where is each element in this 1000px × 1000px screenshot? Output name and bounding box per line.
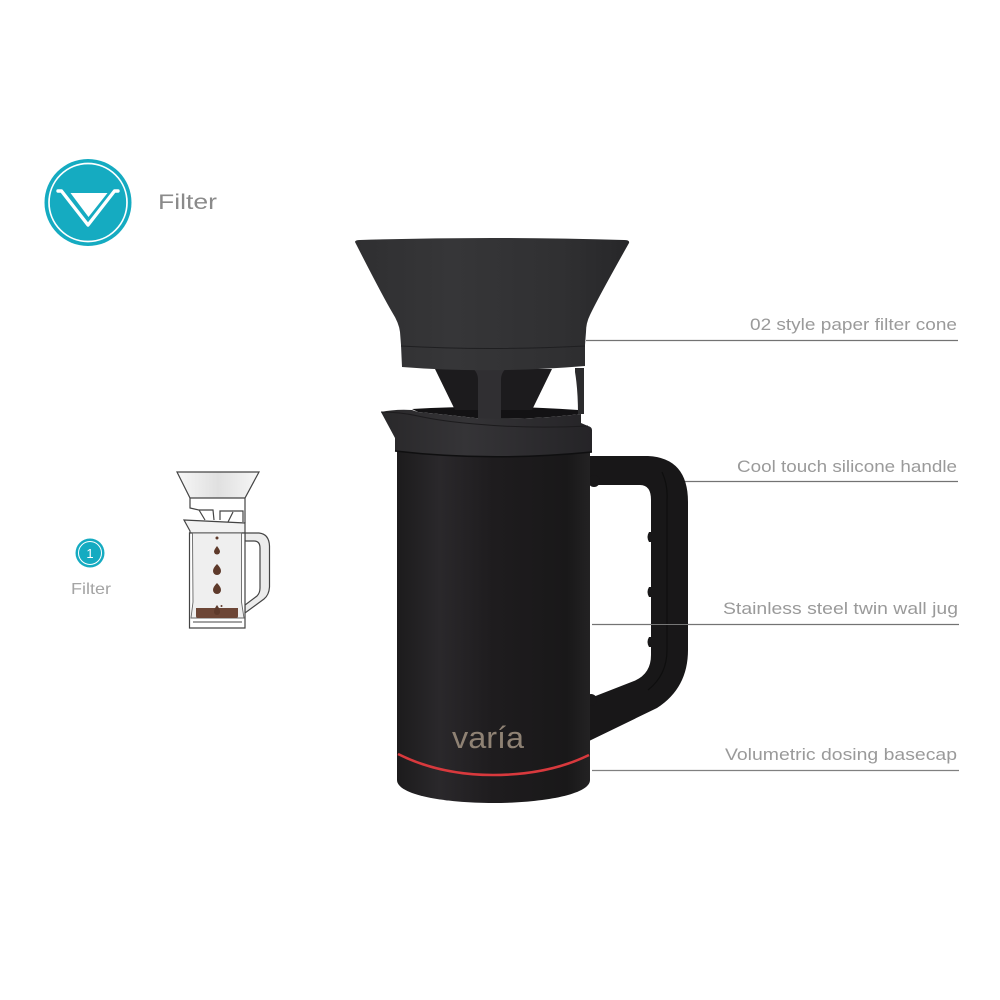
label: Stainless steel twin wall jug: Stainless steel twin wall jug <box>723 600 958 618</box>
label: Cool touch silicone handle: Cool touch silicone handle <box>737 458 957 476</box>
leader over handle <box>651 624 688 626</box>
mini handle <box>245 533 270 613</box>
basecap red line <box>398 754 589 775</box>
mini coffee pool <box>196 608 238 618</box>
dripper cone <box>355 238 629 370</box>
jug body <box>397 450 590 803</box>
label: 02 style paper filter cone: 02 style paper filter cone <box>750 316 957 334</box>
label: Volumetric dosing basecap: Volumetric dosing basecap <box>725 746 957 764</box>
mini jug body <box>190 533 245 628</box>
mini lid <box>184 520 245 533</box>
cone supports and paper cone <box>435 368 584 419</box>
lid rear opening <box>412 407 581 419</box>
leader lines <box>586 340 959 770</box>
mini coffee drops <box>213 536 222 615</box>
mini collar and cone supports <box>190 498 245 523</box>
lid with spout <box>381 410 592 457</box>
logo: Varia teal badge <box>44 159 132 246</box>
step label: Filter: Filter <box>71 581 112 598</box>
step badge: 1: 1 <box>86 546 94 561</box>
brand mark: varía: varía <box>452 720 525 755</box>
handle grip bumps <box>648 532 652 647</box>
heading: Filter: Filter <box>158 191 217 214</box>
handle <box>585 456 688 742</box>
mini diagram: filter brew cross-section <box>177 472 270 628</box>
step badge: 1 <box>76 538 104 568</box>
mini base <box>193 621 242 623</box>
mini funnel <box>177 472 259 498</box>
